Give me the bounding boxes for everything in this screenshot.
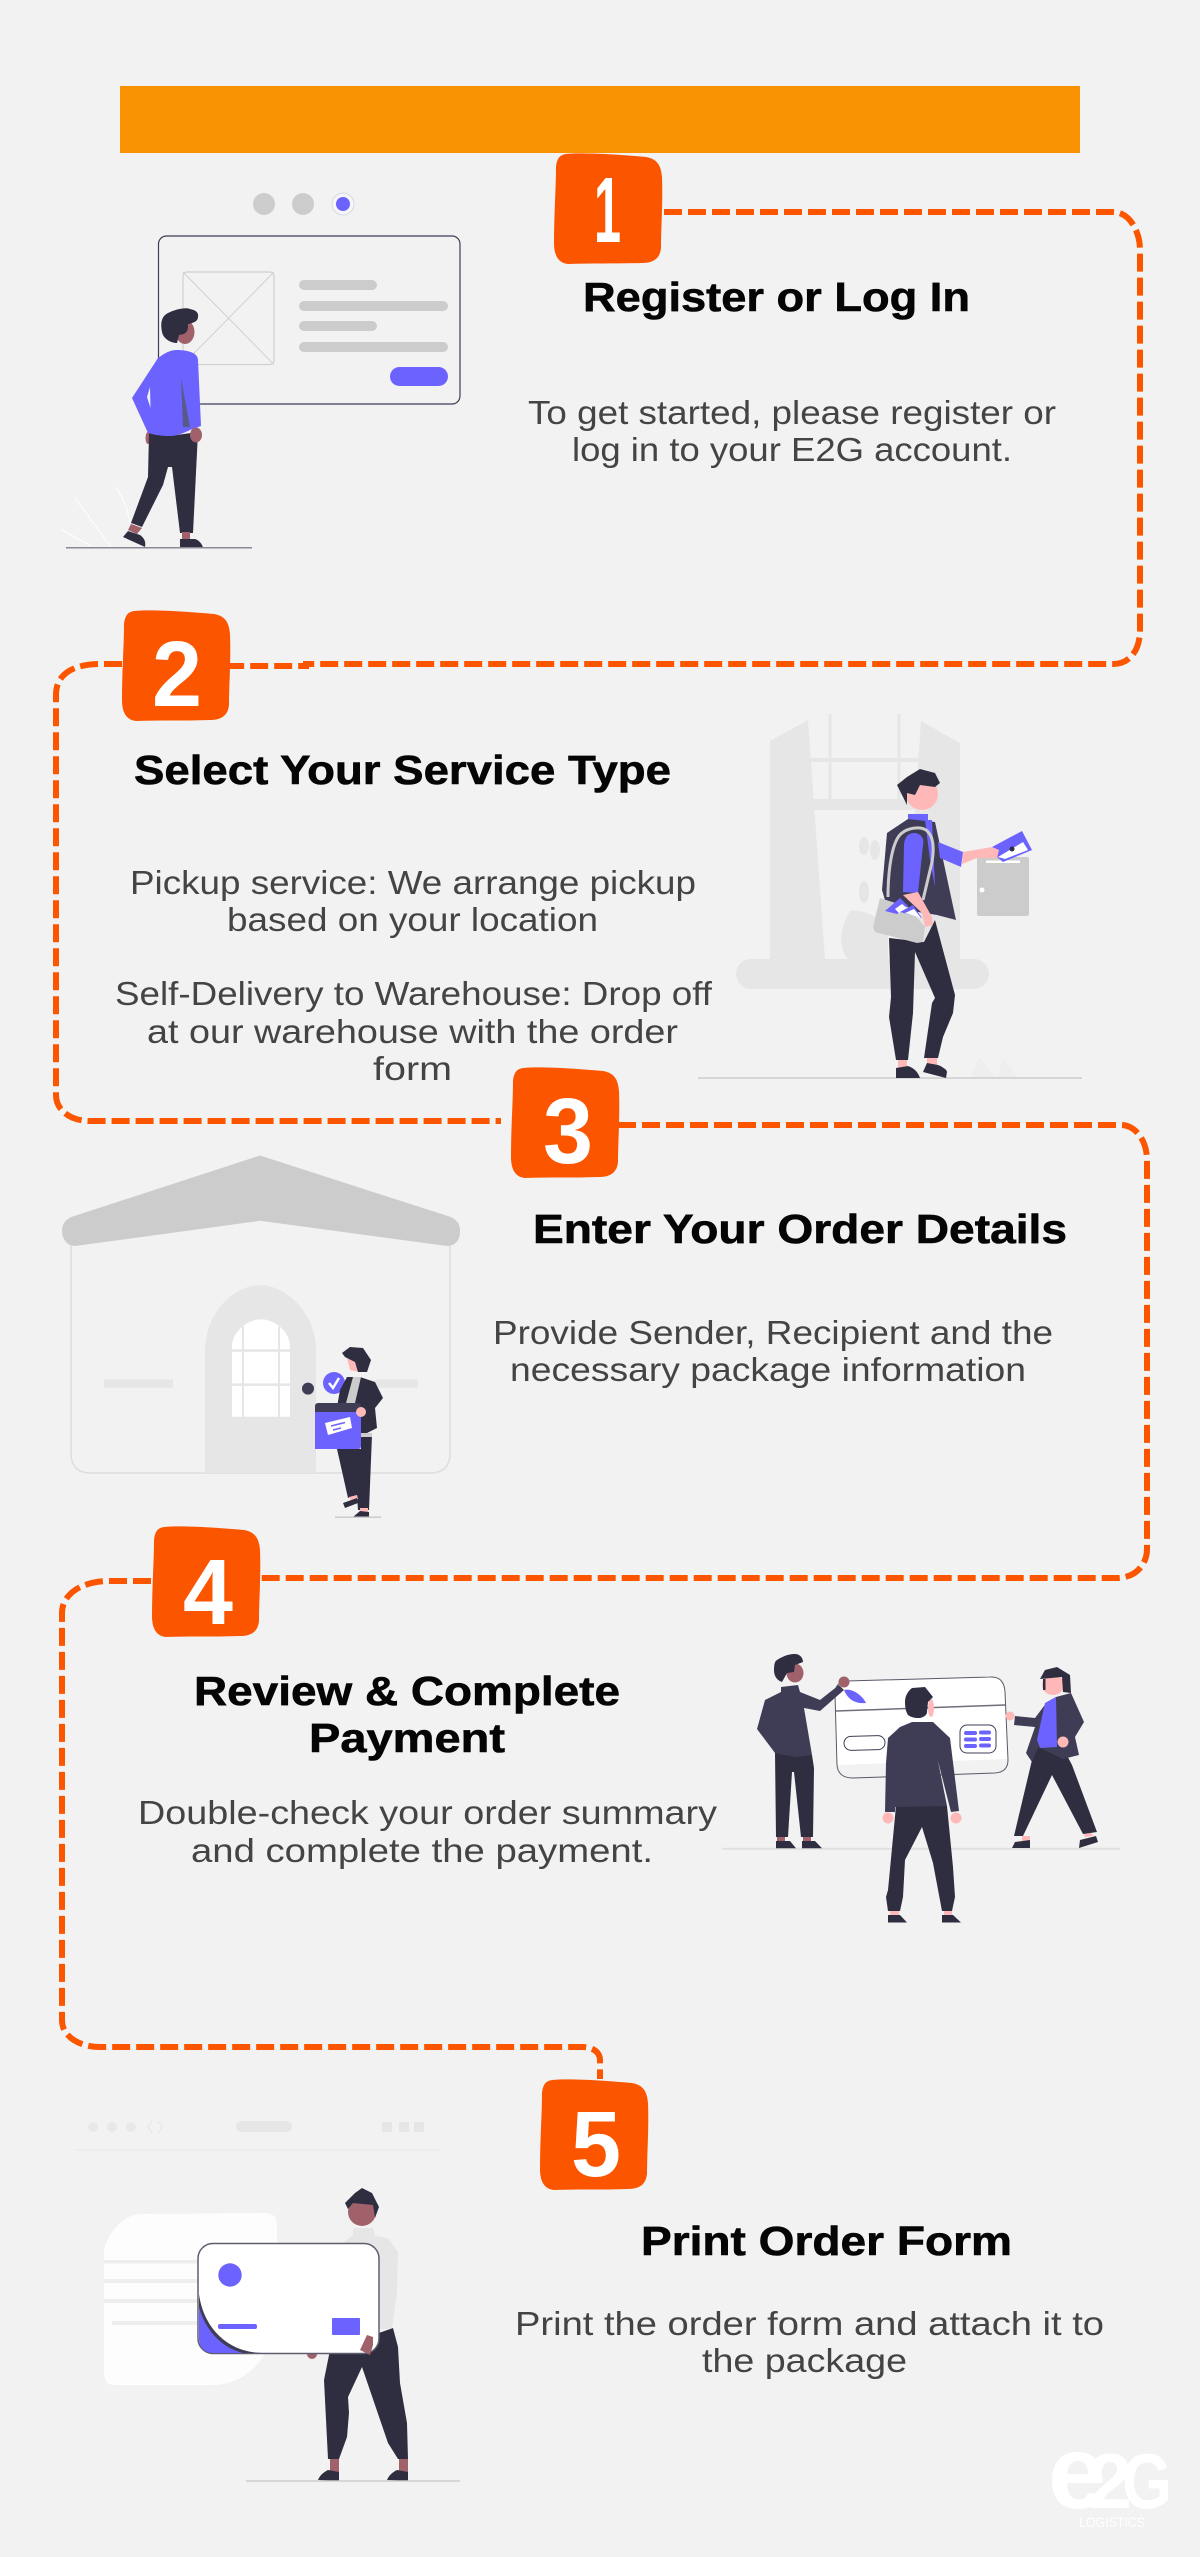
step 3 text (493, 1206, 1067, 1388)
logo: E2G Logistics: LOGISTICS (1079, 2514, 1145, 2530)
heading: step 1: Register or Log In (583, 274, 970, 320)
illustration: person posting mail (698, 714, 1082, 1078)
logo: E2G Logistics: e (1048, 2415, 1106, 2531)
badge: step 2: 2 (152, 622, 202, 726)
heading: step 3: Enter Your Order Details (533, 1206, 1067, 1252)
body: step 4: Double-check your order summary (138, 1794, 718, 1831)
body: step 3 (493, 1314, 1053, 1388)
body: step 2: Pickup service: We arrange pickup (130, 864, 696, 901)
body: step 2: Self-Delivery to Warehouse: Drop off (115, 975, 713, 1012)
body: step 2: form (373, 1050, 452, 1087)
step 5 text (515, 2218, 1104, 2379)
heading: step 4 (194, 1668, 620, 1761)
logo: E2G Logistics (1048, 2415, 1172, 2531)
badge: step 2 (122, 610, 230, 726)
body: step 1: To get started, please register or (528, 394, 1056, 431)
badge: step 4 (152, 1526, 260, 1644)
logo: E2G Logistics: G (1122, 2437, 1172, 2525)
heading: step 2: Select Your Service Type (134, 747, 671, 793)
heading: step 4: Review & Complete (194, 1668, 620, 1714)
body: step 5: the package (702, 2342, 907, 2379)
illustration: person carrying order form (75, 2121, 460, 2481)
body: step 2: at our warehouse with the order (147, 1013, 678, 1050)
heading: step 4: Payment (309, 1715, 505, 1761)
body: step 4: and complete the payment. (191, 1832, 653, 1869)
badge: step 1 (554, 153, 662, 264)
badge: step 1: 1 (594, 158, 621, 262)
step 4 text (138, 1668, 718, 1869)
badge: step 3 (511, 1067, 619, 1183)
heading: step 5: Print Order Form (641, 2218, 1012, 2264)
body: step 3: Provide Sender, Recipient and the (493, 1314, 1053, 1351)
illustration: person at login window (62, 193, 460, 548)
body: step 4 (138, 1794, 718, 1869)
body: step 2 (115, 864, 713, 1087)
illustration: three people and a payment card (722, 1654, 1120, 1922)
body: step 3: necessary package information (510, 1351, 1026, 1388)
body: step 1 (528, 394, 1056, 468)
badge: step 3: 3 (543, 1079, 593, 1183)
dashed connector path (56, 212, 1147, 2079)
body: step 1: log in to your E2G account. (572, 431, 1012, 468)
body: step 5 (515, 2305, 1104, 2379)
step 1 text (528, 274, 1056, 468)
step 2 text (115, 747, 713, 1087)
badge: step 5 (540, 2079, 648, 2196)
body: step 5: Print the order form and attach it to (515, 2305, 1104, 2342)
logo: E2G Logistics: 2 (1088, 2437, 1132, 2525)
badge: step 4: 4 (183, 1540, 233, 1644)
body: step 2: based on your location (227, 901, 598, 938)
badge: step 5: 5 (571, 2092, 621, 2196)
illustration: house with courier (62, 1155, 460, 1517)
header banner (120, 86, 1080, 153)
